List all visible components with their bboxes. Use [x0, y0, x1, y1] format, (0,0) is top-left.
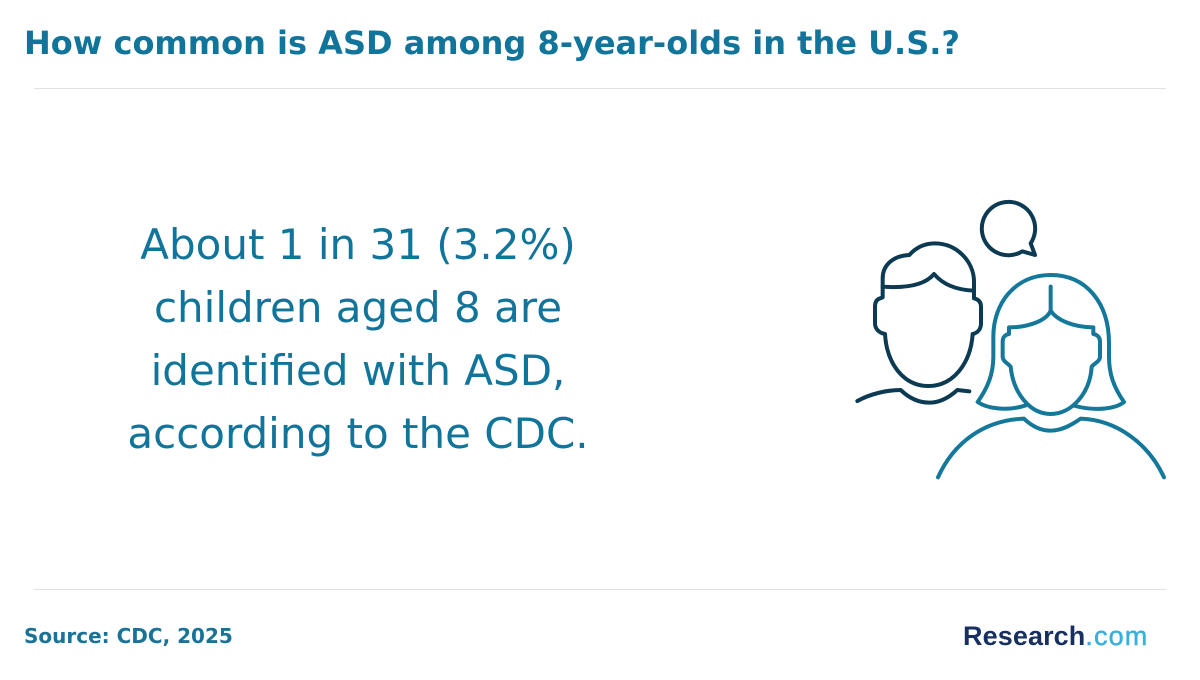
icon: two people with speech bubble	[855, 200, 1166, 480]
main statistic text: children aged 8 are	[154, 283, 562, 332]
icon: man	[857, 243, 981, 403]
icon: speech bubble	[982, 202, 1035, 255]
logo: Research.com: Research.com	[963, 621, 1148, 651]
main statistic text: according to the CDC.	[127, 409, 589, 458]
title: How common is ASD among 8-year-olds in the U.S.?	[24, 24, 960, 62]
icon: woman	[938, 275, 1164, 477]
main statistic text	[127, 220, 589, 458]
main statistic text: identified with ASD,	[151, 346, 565, 395]
main statistic text: About 1 in 31 (3.2%)	[140, 220, 576, 269]
source note: Source: CDC, 2025	[24, 624, 233, 648]
